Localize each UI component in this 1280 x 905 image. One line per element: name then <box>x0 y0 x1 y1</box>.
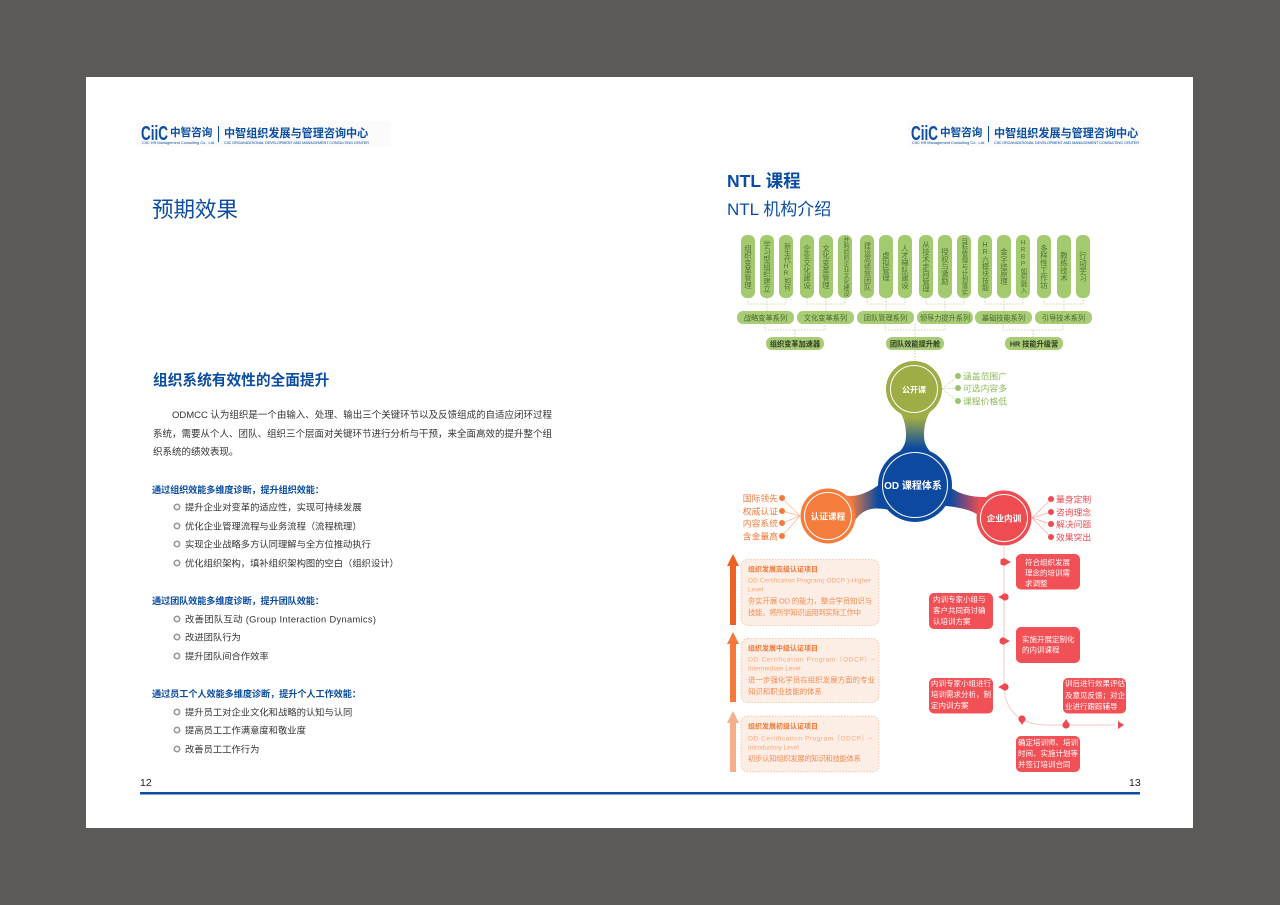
step box 5: 业进行跟踪辅导 <box>1065 701 1118 711</box>
certification intermediate box: 知识和职业技能的体系 <box>748 687 822 696</box>
hub: center: OD 课程体系 <box>884 479 942 492</box>
arrow: introductory <box>727 711 739 772</box>
team list: 改善团队互动 (Group Interaction Dynamics) <box>185 614 376 624</box>
certification intermediate box: Intermediate Level <box>748 666 801 672</box>
step box 1: 符合组织发展 <box>1025 557 1070 567</box>
right page heading: NTL 课程 <box>727 171 801 191</box>
right page logo: CiiC <box>911 123 938 145</box>
topic pills: 新生代HR如何 <box>782 241 791 291</box>
certification advanced box: 夯实开展 OD 的能力，整合学员知识与 <box>748 596 872 606</box>
organization list <box>152 484 399 568</box>
certification advanced box: OD Certification Program( ODCP )-Higher <box>748 578 872 584</box>
team list: 改进团队行为 <box>185 632 241 642</box>
program pills: 组织变革加速器 <box>770 340 821 348</box>
connectors <box>748 298 1083 361</box>
certification introductory box: OD Certification Program（ODCP）– <box>748 734 872 742</box>
right page logo: CIIC HR Management Consulting Co., Ltd. <box>912 141 985 145</box>
intro paragraph: ODMCC 认为组织是一个由输入、处理、输出三个关键环节以及反馈组成的自适应闭环过程 <box>172 409 552 421</box>
in-house timeline <box>998 545 1124 729</box>
section heading: 组织系统有效性的全面提升 <box>153 371 330 389</box>
topic pills: 建设高绩效团队 <box>864 241 871 292</box>
step box 4: 内训专家小组进行 <box>931 678 991 688</box>
topic pills: 虚拟管理 <box>881 251 890 281</box>
program pills: 团队效能提升舱 <box>890 340 941 348</box>
step box 3 <box>1016 627 1080 663</box>
individual list: 改善员工工作行为 <box>185 744 259 754</box>
step box 6: 并签订培训合同 <box>1018 759 1070 769</box>
organization list: 优化组织架构，填补组织架构图的空白（组织设计） <box>185 558 399 568</box>
step box 4: 培训需求分析，制 <box>931 689 991 699</box>
series pills: 领导力提升系列 <box>920 314 970 322</box>
arrow: advanced <box>727 554 739 625</box>
topic pills: 授权与激励 <box>940 248 950 286</box>
hub: in-house: 企业内训 <box>987 512 1022 524</box>
public course features: 课程价格低 <box>963 396 1007 406</box>
topic pills: HRBP如何融入 <box>1020 240 1027 294</box>
intro paragraph: 织系统的绩效表现。 <box>153 446 239 458</box>
right page logo: 中智组织发展与管理咨询中心 <box>994 126 1138 140</box>
certification features: 国际领先 <box>743 492 778 504</box>
in-house features: 咨询理念 <box>1056 506 1091 518</box>
program pills: HR 技能升级营 <box>1010 340 1058 348</box>
step box 1 <box>1016 554 1080 590</box>
left page logo: 中智咨询 <box>170 126 213 139</box>
page title: 预期效果 <box>152 198 238 222</box>
individual list: 通过员工个人效能多维度诊断，提升个人工作效能： <box>152 688 361 699</box>
topic pills: 并购后的企业文化建设 <box>842 236 849 298</box>
gradient necks <box>895 410 935 456</box>
certification intermediate box: OD Certification Program（ODCP）– <box>748 656 875 664</box>
intro paragraph: 系统，需要从个人、团队、组织三个层面对关键环节进行分析与干预，来全面高效的提升整个组 <box>153 428 552 440</box>
certification introductory box: 初步认知组织发展的知识和技能体系 <box>748 754 861 763</box>
organization list: 实现企业战略多方认同理解与全方位推动执行 <box>185 538 371 550</box>
step box 4: 定内训方案 <box>931 700 969 710</box>
series pills: 基础技能系列 <box>982 314 1025 322</box>
certification advanced box: 技能，将所学知识运用到实际工作中 <box>748 608 861 617</box>
in-house features <box>1048 494 1091 542</box>
step box 4 <box>929 678 993 714</box>
left page logo: CIIC ORGANIZATIONAL DEVELOPMENT AND MANAGEMENT CONSULTING CENTER <box>224 141 369 145</box>
certification introductory box: 组织发展初级认证项目 <box>748 722 818 730</box>
series pills: 战略变革系列 <box>744 314 787 322</box>
individual list <box>152 688 361 754</box>
hub: public course: 公开课 <box>902 384 926 394</box>
step box 5: 及意见反馈；对企 <box>1065 690 1125 700</box>
right page logo <box>908 121 1141 147</box>
certification features: 内容系统 <box>743 518 778 528</box>
hub: center <box>878 448 952 522</box>
step box 2 <box>929 593 993 629</box>
right page logo: CIIC ORGANIZATIONAL DEVELOPMENT AND MANAGEMENT CONSULTING CENTER <box>994 141 1139 145</box>
certification advanced box: 组织发展高级认证项目 <box>748 564 818 574</box>
organization list: 通过组织效能多维度诊断，提升组织效能： <box>152 484 324 495</box>
certification features: 含金量高 <box>743 530 778 542</box>
certification features <box>743 492 785 542</box>
topic pills: 行动学习 <box>1078 251 1088 282</box>
series pills: 团队管理系列 <box>864 314 907 322</box>
topic pills: HR六模块技能 <box>982 242 989 292</box>
page number left: 12 <box>140 777 152 789</box>
step box 5 <box>1063 678 1126 714</box>
topic pills: 学习型组织建立 <box>762 240 772 293</box>
series pills: 文化变革系列 <box>804 314 847 322</box>
in-house features: 解决问题 <box>1056 518 1091 530</box>
certification intermediate box <box>741 638 879 702</box>
series pills <box>737 311 1092 324</box>
topic pills: 文化变革管理 <box>821 244 830 289</box>
right page subheading: NTL 机构介绍 <box>727 200 831 219</box>
topic pills: 教练技术 <box>1059 251 1068 282</box>
topic pills <box>741 235 1090 298</box>
certification introductory box <box>741 716 879 772</box>
public course features <box>955 370 1007 406</box>
certification advanced box: Level <box>748 586 763 594</box>
topic pills: 组织变革管理 <box>743 244 752 289</box>
hub: certification <box>800 488 856 544</box>
right page logo: 中智咨询 <box>940 126 983 139</box>
step box 3: 的内训课程 <box>1022 644 1060 654</box>
team list <box>152 595 376 662</box>
intro paragraph <box>153 409 552 458</box>
in-house features: 量身定制 <box>1056 494 1091 504</box>
step box 2: 内训专家小组与 <box>933 594 986 604</box>
topic pills: 人才梯队建设 <box>900 244 910 290</box>
topic pills: 目标管理与计划落实 <box>960 237 968 297</box>
topic pills: 多样性工作坊 <box>1039 244 1048 290</box>
individual list: 提高员工工作满意度和敬业度 <box>185 724 306 736</box>
left page logo <box>137 121 391 147</box>
topic pills: 企业文化建设 <box>802 244 812 290</box>
program pills <box>766 337 1063 350</box>
public course features: 涵盖范围广 <box>963 370 1007 382</box>
team list: 提升团队间合作效率 <box>185 650 269 662</box>
certification introductory box: Introductory Level <box>748 744 799 752</box>
public course features: 可选内容多 <box>963 382 1007 394</box>
left page logo: 中智组织发展与管理咨询中心 <box>224 126 368 140</box>
team list: 通过团队效能多维度诊断，提升团队效能： <box>152 595 324 606</box>
left page logo: CIIC HR Management Consulting Co., Ltd. <box>142 141 215 145</box>
topic pills: 金字塔原理 <box>999 248 1008 285</box>
hub: certification: 认证课程 <box>811 510 846 522</box>
step box 6 <box>1016 736 1080 772</box>
hub: in-house <box>976 490 1032 546</box>
step box 6: 确定培训师、培训 <box>1018 737 1078 747</box>
topic pills: 从技术走向管理 <box>921 241 930 293</box>
fan lines <box>942 376 958 401</box>
step box 5: 训后进行效果评估 <box>1065 678 1125 688</box>
organization list: 提升企业对变革的适应性，实现可持续发展 <box>185 502 362 512</box>
course tree <box>737 235 1092 350</box>
certification intermediate box: 进一步强化学员在组织发展方面的专业 <box>748 676 875 684</box>
certification features: 权威认证 <box>743 506 778 516</box>
step box 2: 客户共同商讨确 <box>933 605 986 615</box>
footer rule <box>140 792 1140 794</box>
open brochure spread <box>86 77 1193 828</box>
step box 1: 求调整 <box>1025 578 1048 588</box>
certification advanced box <box>741 560 879 626</box>
step box 3: 实施开展定制化 <box>1022 634 1075 644</box>
in-house features: 效果突出 <box>1056 532 1091 542</box>
arrow: intermediate <box>727 632 739 702</box>
step box 6: 时间、实施计划等 <box>1018 748 1078 758</box>
page number right: 13 <box>1129 777 1141 789</box>
OD course system hub diagram <box>800 361 1032 546</box>
left page logo: CiiC <box>141 123 168 145</box>
hub: public course <box>886 361 942 417</box>
step box 1: 理念的培训需 <box>1025 568 1070 578</box>
certification intermediate box: 组织发展中级认证项目 <box>748 644 818 652</box>
step box 2: 认培训方案 <box>933 616 971 626</box>
series pills: 引导技术系列 <box>1042 314 1085 322</box>
organization list: 优化企业管理流程与业务流程（流程梳理） <box>185 520 362 532</box>
individual list: 提升员工对企业文化和战略的认知与认同 <box>185 706 352 718</box>
